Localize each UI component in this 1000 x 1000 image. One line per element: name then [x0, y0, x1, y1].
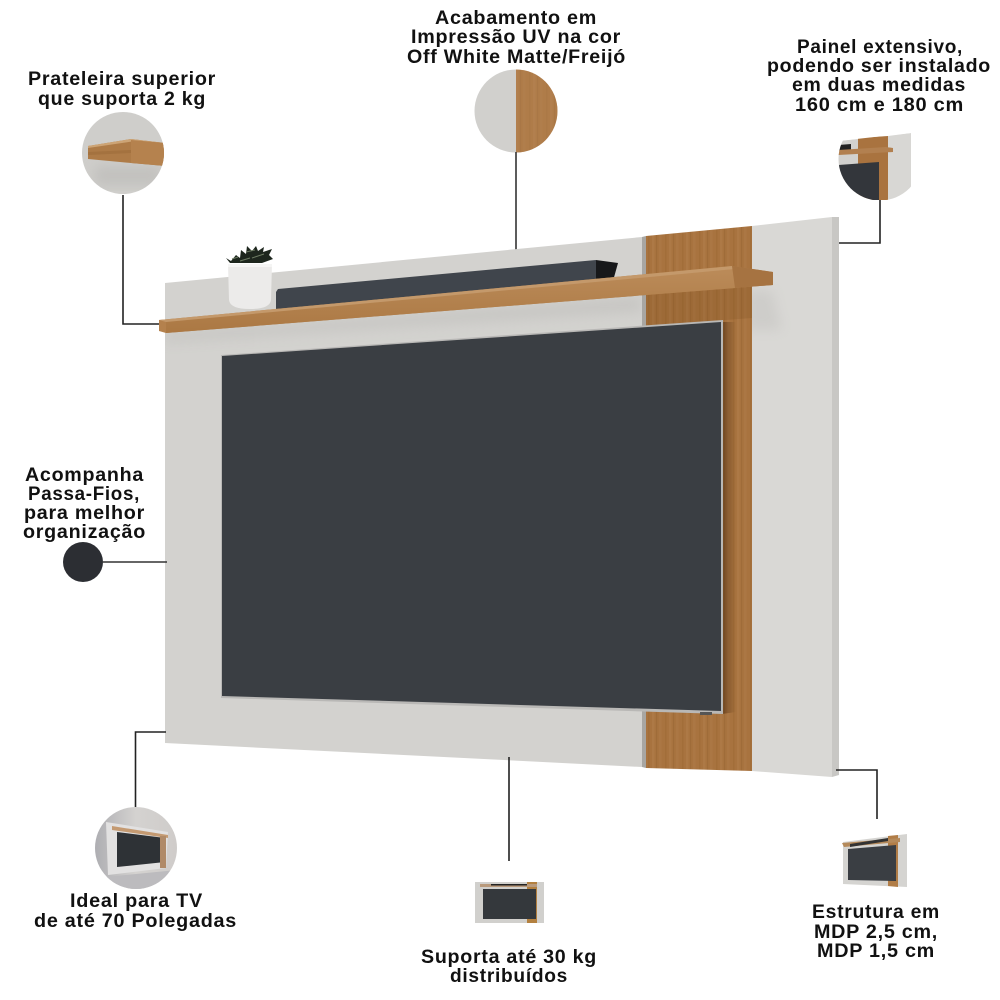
shelf [159, 266, 773, 333]
heading: prateleira superior: Prateleira superior [28, 69, 216, 90]
icon: angled view thumbnail [842, 834, 907, 887]
leader line: panel [837, 200, 880, 243]
heading: ideal para TV: de até 70 Polegadas [34, 911, 237, 932]
heading: estrutura: Estrutura em [812, 902, 940, 923]
heading: acabamento: Off White Matte/Freijó [407, 47, 626, 68]
panel: wood strip [642, 226, 752, 771]
icon: panel corner detail [838, 133, 911, 201]
leader line: finish [515, 152, 517, 250]
product: TV panel [159, 217, 839, 777]
icon: plant pot [226, 246, 273, 309]
callout: passa-fios [23, 465, 167, 582]
callout: painel extensivo [767, 37, 991, 243]
heading: estrutura: MDP 2,5 cm, [814, 922, 938, 943]
heading: acabamento [407, 8, 626, 68]
heading: passa-fios: para melhor [24, 503, 145, 524]
icon: front view thumbnail [475, 882, 544, 923]
heading: acabamento: Impressão UV na cor [411, 27, 621, 48]
icon: finish swatch circle [474, 69, 558, 153]
panel: left off-white board [165, 237, 642, 767]
heading: painel extensivo: em duas medidas [792, 75, 966, 96]
heading: estrutura [812, 902, 940, 962]
soundbar [276, 260, 618, 312]
leader line: passa-fios [103, 561, 167, 563]
heading: passa-fios: organização [23, 522, 146, 543]
heading: ideal para TV: Ideal para TV [70, 891, 203, 912]
shelf shadow on board [375, 300, 636, 323]
heading: suporta 30 kg [421, 947, 597, 987]
callout: estrutura [812, 770, 940, 962]
heading: painel extensivo [767, 37, 991, 116]
heading: painel extensivo: Painel extensivo, [797, 37, 963, 58]
callout: acabamento [407, 8, 626, 250]
heading: suporta 30 kg: distribuídos [450, 966, 568, 987]
panel: right off-white board [745, 217, 839, 777]
leader line: TV size [136, 732, 166, 807]
callout: suporta 30 kg [421, 757, 597, 987]
TV screen [221, 320, 723, 715]
heading: passa-fios [23, 465, 146, 543]
heading: passa-fios: Passa-Fios, [28, 484, 140, 505]
heading: suporta 30 kg: Suporta até 30 kg [421, 947, 597, 968]
heading: passa-fios: Acompanha [25, 465, 144, 486]
heading: prateleira superior [28, 69, 216, 110]
heading: estrutura: MDP 1,5 cm [817, 941, 935, 962]
heading: painel extensivo: podendo ser instalado [767, 56, 991, 77]
icon: room photo circle [95, 807, 177, 889]
leader line: shelf [123, 195, 160, 324]
icon: dark circle [63, 542, 103, 582]
callout: prateleira superior [28, 69, 216, 324]
heading: prateleira superior: que suporta 2 kg [38, 89, 206, 110]
callout: ideal para TV [34, 732, 237, 932]
leader line: structure [836, 770, 877, 819]
heading: painel extensivo: 160 cm e 180 cm [795, 95, 964, 116]
heading: acabamento: Acabamento em [435, 8, 597, 29]
icon: circular shelf detail [80, 110, 166, 196]
leader line: weight [508, 757, 510, 861]
heading: ideal para TV [34, 891, 237, 932]
